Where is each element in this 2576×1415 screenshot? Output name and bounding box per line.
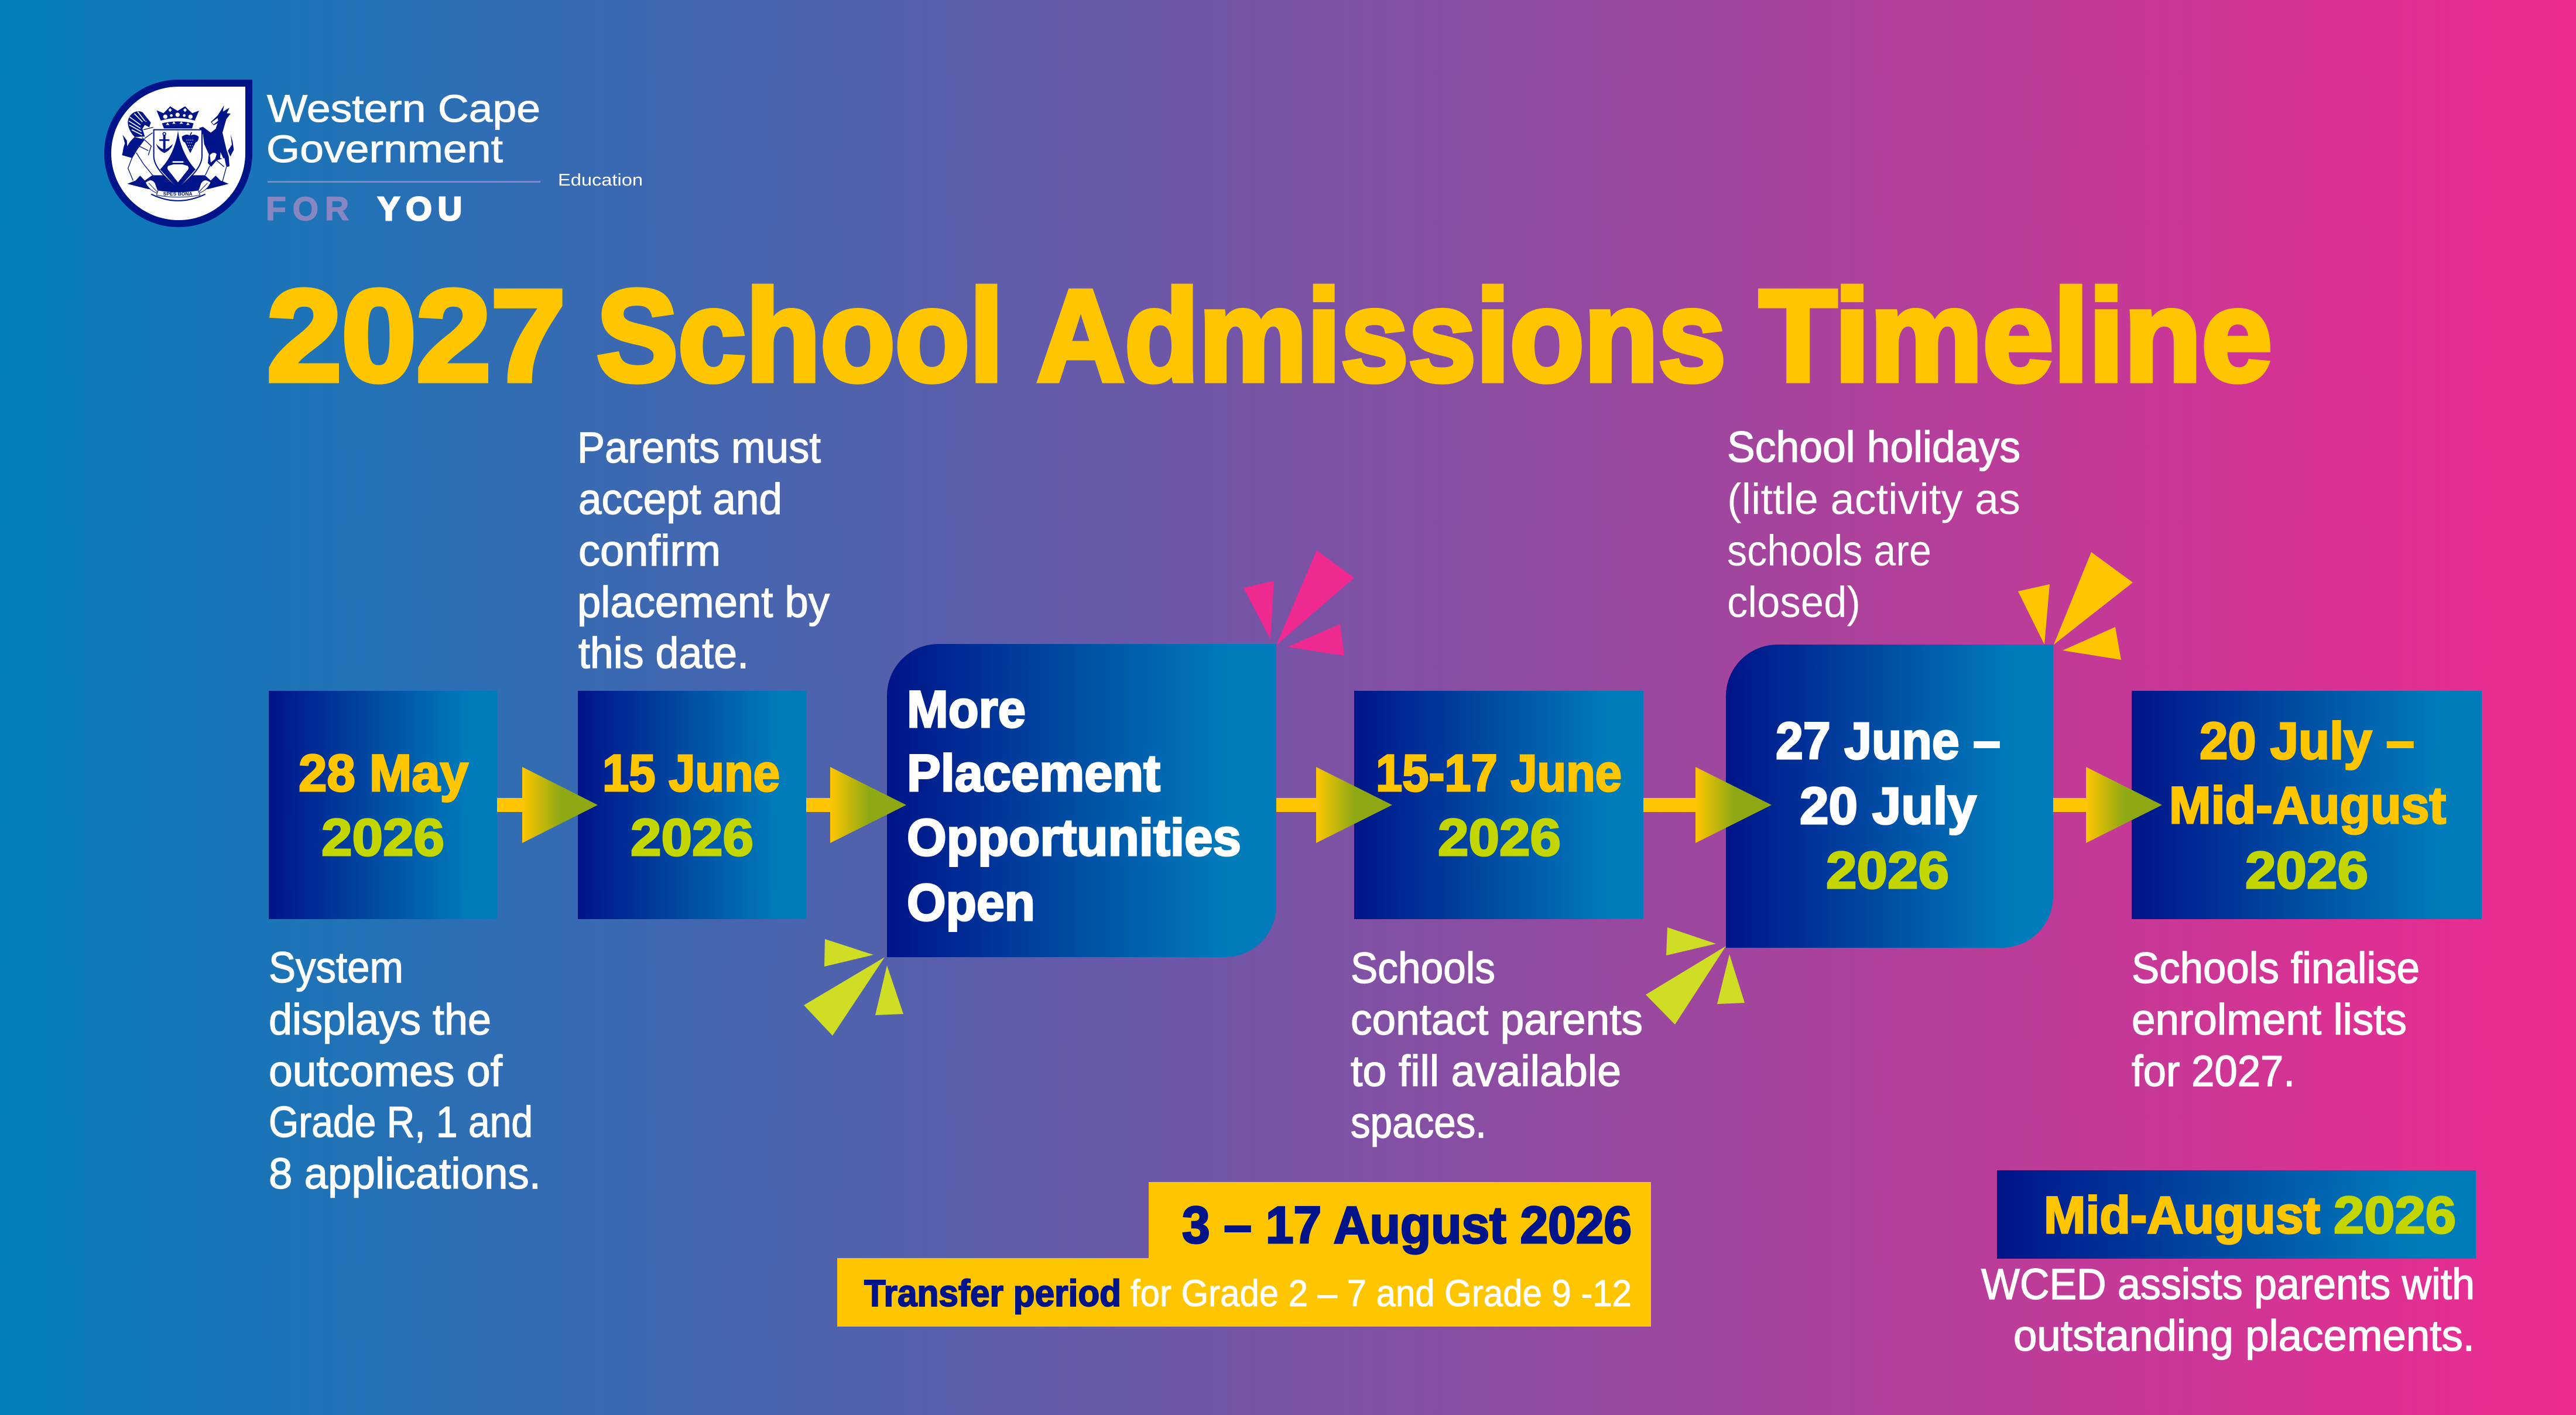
arrow 4 bbox=[1643, 767, 1772, 843]
text: schools contact parents: Schools bbox=[1351, 944, 1495, 992]
panel: note above 15 June: this date. bbox=[578, 629, 749, 677]
text: WCED assists parents: WCED assists parents with bbox=[1981, 1260, 2475, 1308]
arrow 5 bbox=[2053, 767, 2162, 843]
text: system displays outcomes bbox=[269, 943, 541, 1198]
text: schools finalise enrolment lists: for 2027. bbox=[2132, 1047, 2295, 1095]
title: Admissions bbox=[1037, 263, 1726, 409]
logo wordmark: Government bbox=[266, 127, 503, 170]
motto: SPES BONA bbox=[163, 191, 193, 197]
text: system displays outcomes: Grade R, 1 and bbox=[269, 1098, 533, 1146]
panel: 28 May box: 2026 bbox=[321, 808, 444, 866]
panel: school holidays note: schools are bbox=[1727, 526, 1931, 575]
panel: 20 July – Mid-August box: 20 July – bbox=[2200, 711, 2414, 770]
ground and ribbon base bbox=[127, 175, 229, 192]
text: system displays outcomes: outcomes of bbox=[269, 1047, 502, 1095]
arrow 3 bbox=[1276, 767, 1392, 843]
text: system displays outcomes: System bbox=[269, 943, 403, 992]
panel: 20 July – Mid-August box bbox=[2132, 691, 2482, 919]
logo wordmark: Western Cape bbox=[267, 87, 540, 130]
panel: 15 June box: 15 June bbox=[602, 744, 780, 802]
panel: transfer period: 3 – 17 August 2026 bbox=[1182, 1195, 1632, 1254]
text: schools contact parents: contact parents bbox=[1351, 995, 1643, 1044]
title: Timeline bbox=[1759, 263, 2272, 409]
leaves bbox=[145, 180, 211, 194]
title bbox=[267, 263, 2272, 409]
icon: coat of arms shield bbox=[104, 80, 252, 227]
panel: 27 June – 20 July box: 20 July bbox=[1800, 776, 1976, 835]
kudu supporter bbox=[199, 105, 234, 181]
icon: lime burst on holidays box bbox=[1646, 927, 1745, 1025]
text: schools contact parents bbox=[1351, 944, 1643, 1147]
text: schools finalise enrolment lists bbox=[2132, 944, 2420, 1095]
panel: mid-August 2026: 2026 bbox=[2334, 1186, 2456, 1244]
text: WCED assists parents bbox=[1981, 1260, 2475, 1360]
shield with anchor, grapes and jug bbox=[154, 130, 202, 189]
text: schools finalise enrolment lists: enrolment lists bbox=[2132, 995, 2407, 1044]
panel: note above 15 June: placement by bbox=[577, 578, 830, 626]
arrow 1 bbox=[497, 767, 598, 843]
panel: More Placement Opportunities Open box: Placement bbox=[907, 744, 1160, 802]
logo: Western Cape Government bbox=[104, 80, 643, 228]
panel: school holidays note: School holidays bbox=[1727, 423, 2020, 471]
panel: transfer period: for Grade 2 – 7 and Grade 9 -12 bbox=[1131, 1272, 1632, 1314]
ribbon bbox=[156, 190, 200, 197]
panel: More Placement Opportunities Open box: Open bbox=[907, 873, 1035, 931]
text: schools finalise enrolment lists: Schools finalise bbox=[2132, 944, 2420, 992]
panel: note above 15 June: Parents must bbox=[577, 423, 821, 472]
panel: 15-17 June box bbox=[1354, 691, 1643, 919]
text: system displays outcomes: displays the bbox=[269, 995, 491, 1044]
panel: More Placement Opportunities Open box: Opportunities bbox=[907, 808, 1241, 866]
panel: school holidays note: closed) bbox=[1727, 578, 1861, 626]
panel: 28 May box bbox=[269, 691, 497, 919]
panel: More Placement Opportunities Open box bbox=[887, 644, 1276, 957]
panel: transfer period bbox=[837, 1182, 1651, 1327]
panel: note above 15 June: confirm bbox=[578, 526, 721, 575]
text: schools contact parents: spaces. bbox=[1351, 1098, 1486, 1147]
panel: 15 June box: 2026 bbox=[631, 808, 753, 866]
panel: transfer period: Transfer period bbox=[864, 1272, 1121, 1314]
panel: 20 July – Mid-August box: 2026 bbox=[2245, 841, 2368, 899]
panel: 27 June – 20 July box: 2026 bbox=[1826, 841, 1949, 899]
arrow 2 bbox=[806, 767, 906, 843]
panel: 27 June – 20 July box: 27 June – bbox=[1776, 711, 2000, 770]
panel: school holidays note: (little activity as bbox=[1727, 475, 2020, 523]
panel: mid-August 2026 bbox=[1997, 1170, 2476, 1259]
icon: lime burst on placement box bbox=[804, 939, 903, 1036]
logo wordmark bbox=[266, 87, 643, 228]
panel: 15-17 June box: 2026 bbox=[1438, 808, 1561, 866]
logo wordmark: Education bbox=[558, 171, 643, 190]
panel: school holidays note bbox=[1727, 423, 2020, 626]
panel: 28 May box: 28 May bbox=[299, 744, 468, 802]
panel: 15 June box bbox=[578, 691, 806, 919]
text: WCED assists parents: outstanding placements. bbox=[2013, 1311, 2475, 1360]
zebra supporter bbox=[122, 111, 153, 180]
title: School bbox=[597, 263, 1003, 409]
panel: mid-August 2026: Mid-August bbox=[2044, 1186, 2320, 1244]
logo wordmark: YOU bbox=[378, 190, 462, 228]
panel: note above 15 June: accept and bbox=[578, 475, 782, 523]
panel: More Placement Opportunities Open box: More bbox=[907, 680, 1026, 738]
panel: 15-17 June box: 15-17 June bbox=[1376, 744, 1622, 802]
text: system displays outcomes: 8 applications. bbox=[269, 1149, 541, 1198]
text: schools contact parents: to fill available bbox=[1351, 1047, 1621, 1095]
panel: note above 15 June bbox=[577, 423, 830, 677]
panel: 20 July – Mid-August box: Mid-August bbox=[2169, 776, 2446, 834]
icon: yellow burst bbox=[2018, 552, 2133, 660]
panel: 27 June – 20 July box bbox=[1726, 645, 2053, 948]
logo wordmark: FOR bbox=[266, 190, 349, 228]
icon: pink burst bbox=[1244, 550, 1354, 656]
crown bbox=[156, 107, 199, 128]
title: 2027 bbox=[267, 263, 566, 409]
